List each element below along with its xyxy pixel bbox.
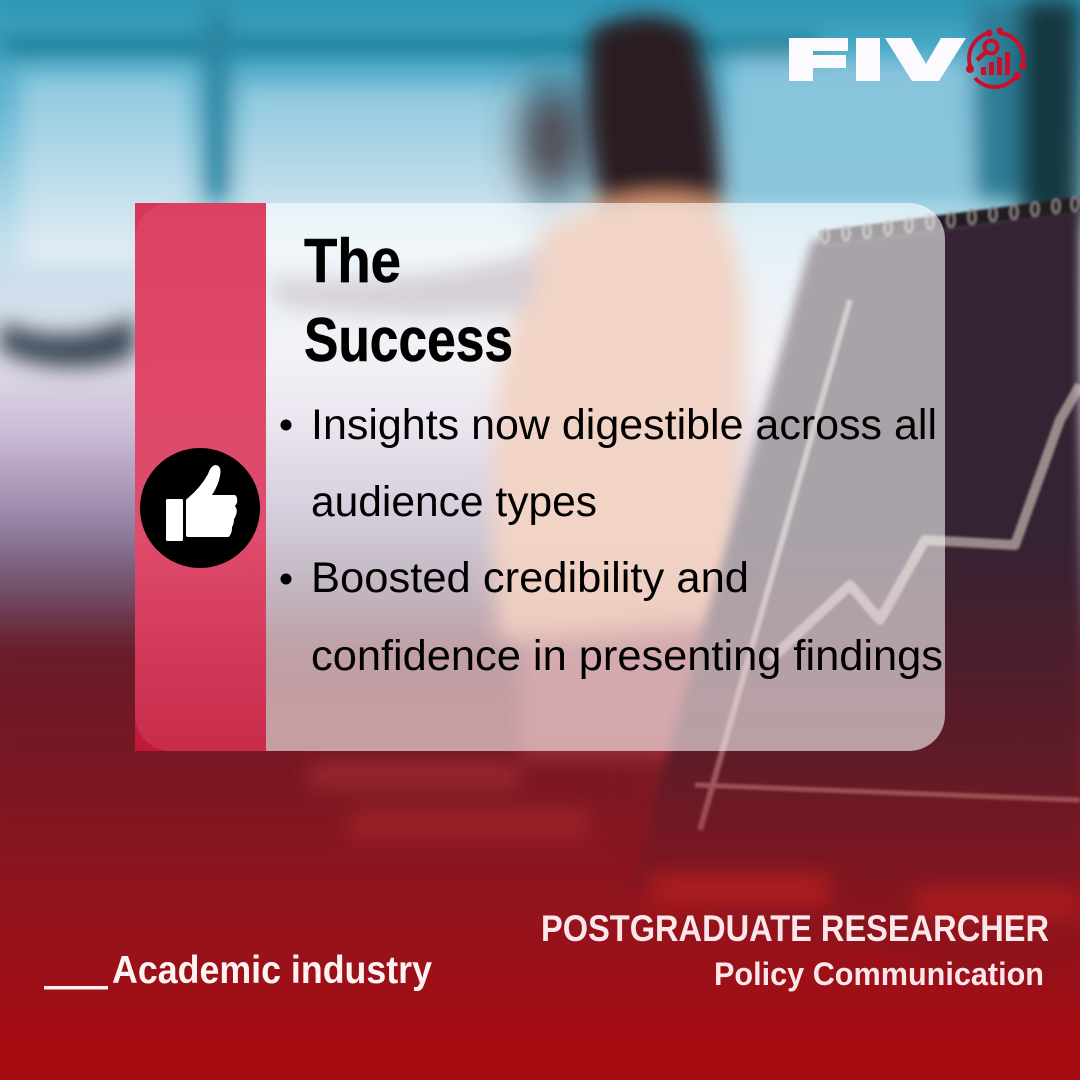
accent strip [135, 203, 266, 751]
logo wordmark [789, 38, 966, 81]
heading: The [304, 227, 401, 296]
table and blurred objects [310, 765, 1080, 920]
footer left: industry label: Academic industry [112, 949, 432, 992]
bullet 1: Insights now digestible across all [311, 401, 937, 449]
heading [304, 227, 513, 375]
logo: FIV with analytics icon [789, 28, 1026, 87]
panel base: translucent white card [135, 203, 945, 751]
spiral binding [820, 197, 1080, 243]
icon: analytics cycle [966, 28, 1026, 87]
bullet 1 [280, 401, 937, 526]
woman figure [270, 15, 745, 760]
footer right: role [541, 908, 1049, 992]
icon: thumbs up [140, 448, 260, 568]
footer right: role: Policy Communication [714, 956, 1044, 992]
bullet 2: Boosted credibility and [311, 554, 749, 602]
heading: Success [304, 306, 513, 375]
panel: the success card [135, 203, 945, 751]
easel board [630, 205, 1080, 1000]
bullet 2: confidence in presenting findings [311, 632, 943, 680]
bullet 1: audience types [311, 478, 597, 526]
bullet list [280, 401, 943, 680]
bullet 2 [280, 554, 943, 680]
chalk chart [695, 300, 1080, 830]
